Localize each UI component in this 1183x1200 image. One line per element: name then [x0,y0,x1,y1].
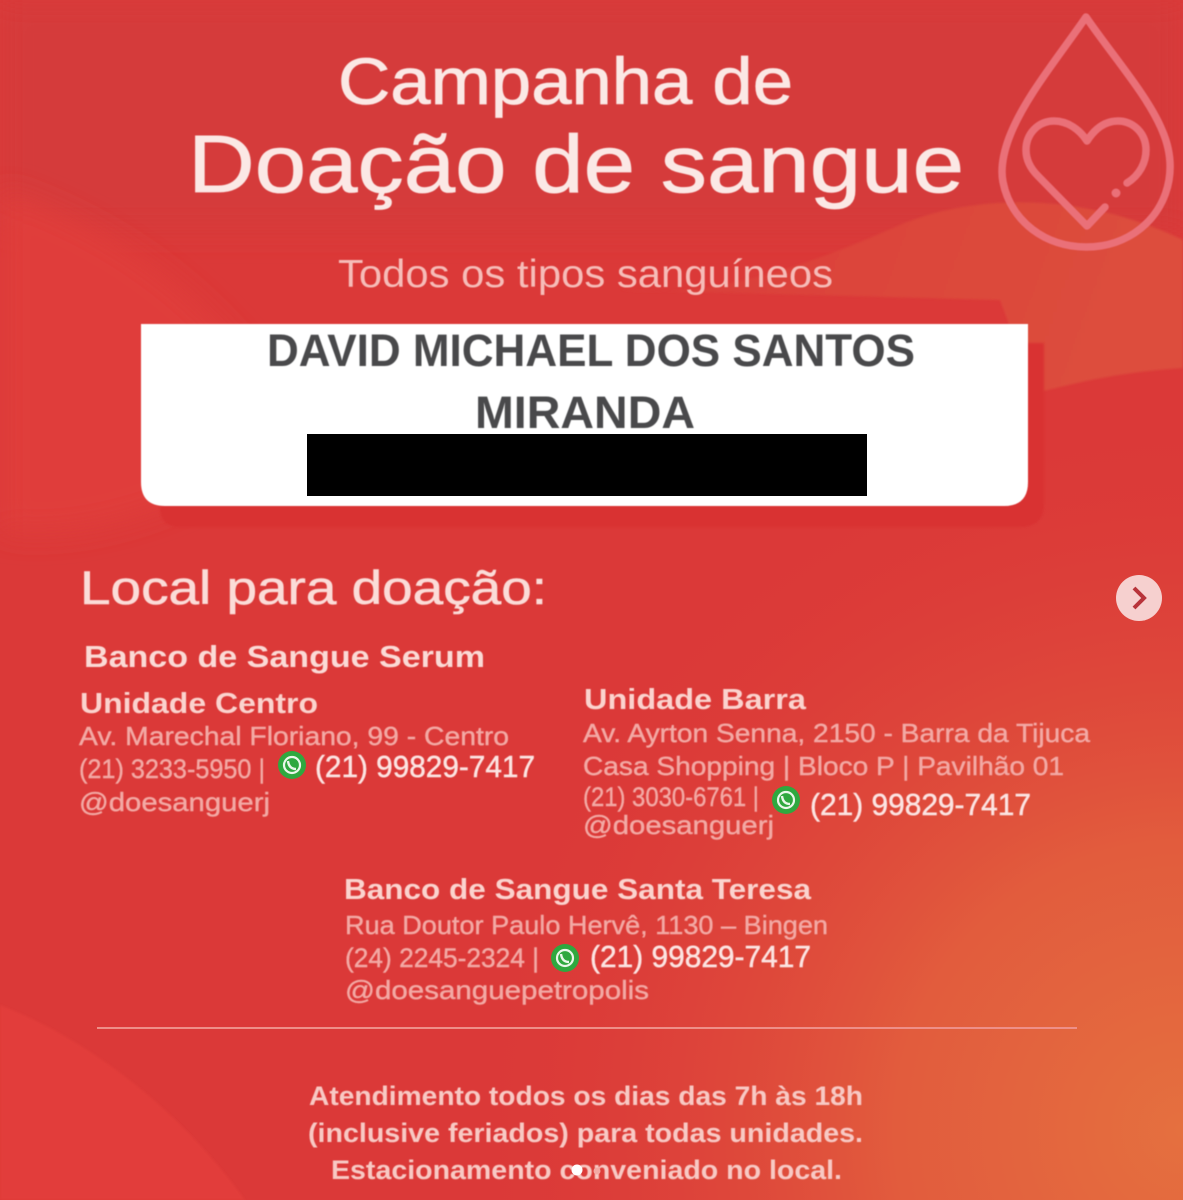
block: banco de sangue santa teresa: @doesanguepetropolis [345,975,649,1005]
block: unidade centro: Av. Marechal Floriano, 99 - Centro [79,721,509,751]
block: unidade barra: (21) 3030-6761 | [583,782,759,812]
subtitle: Todos os tipos sanguíneos [338,253,833,296]
block: unidade centro: @doesanguerj [79,787,270,817]
donor name: MIRANDA [475,387,695,438]
icon: blood drop with heart [1002,17,1170,247]
block: unidade barra: Unidade Barra [584,684,807,716]
block: unidade barra: (21) 99829-7417 [810,787,1031,822]
donor name: DAVID MICHAEL DOS SANTOS [267,325,915,376]
redaction bar [307,434,867,496]
block: unidade centro [79,688,535,817]
heading: local para doação: Local para doação: [80,561,547,614]
icon: whatsapp santa teresa [551,944,579,972]
block: banco de sangue santa teresa [344,874,828,1005]
block: unidade centro: (21) 99829-7417 [315,749,535,784]
footer text: Estacionamento conveniado no local. [331,1155,842,1185]
block: banco de sangue santa teresa: Banco de Sangue Santa Teresa [344,874,812,906]
block: banco de sangue santa teresa: (21) 99829-7417 [590,939,811,974]
icon: whatsapp centro [278,751,306,779]
block: banco de sangue santa teresa: Rua Doutor Paulo Hervê, 1130 – Bingen [345,910,828,940]
title: Doação de sangue [188,119,964,210]
carousel dots [572,1164,600,1176]
block: unidade barra [583,684,1091,840]
banco de sangue serum: Banco de Sangue Serum [84,639,485,674]
block: unidade barra: Casa Shopping | Bloco P | Pavilhão 01 [583,751,1064,781]
title [188,44,964,210]
icon: whatsapp barra [772,786,800,814]
block: unidade barra: @doesanguerj [583,810,774,840]
footer text: Atendimento todos os dias das 7h às 18h [309,1081,863,1111]
footer text [308,1081,863,1185]
footer text: (inclusive feriados) para todas unidades. [308,1118,863,1148]
name card [141,324,1044,527]
block: unidade centro: (21) 3233-5950 | [79,754,265,784]
block: banco de sangue santa teresa: (24) 2245-2324 | [345,943,539,973]
block: unidade centro: Unidade Centro [80,688,318,720]
donor name [267,325,915,438]
title: Campanha de [338,44,793,118]
block: unidade barra: Av. Ayrton Senna, 2150 - Barra da Tijuca [583,718,1091,748]
carousel next button [1116,575,1162,621]
